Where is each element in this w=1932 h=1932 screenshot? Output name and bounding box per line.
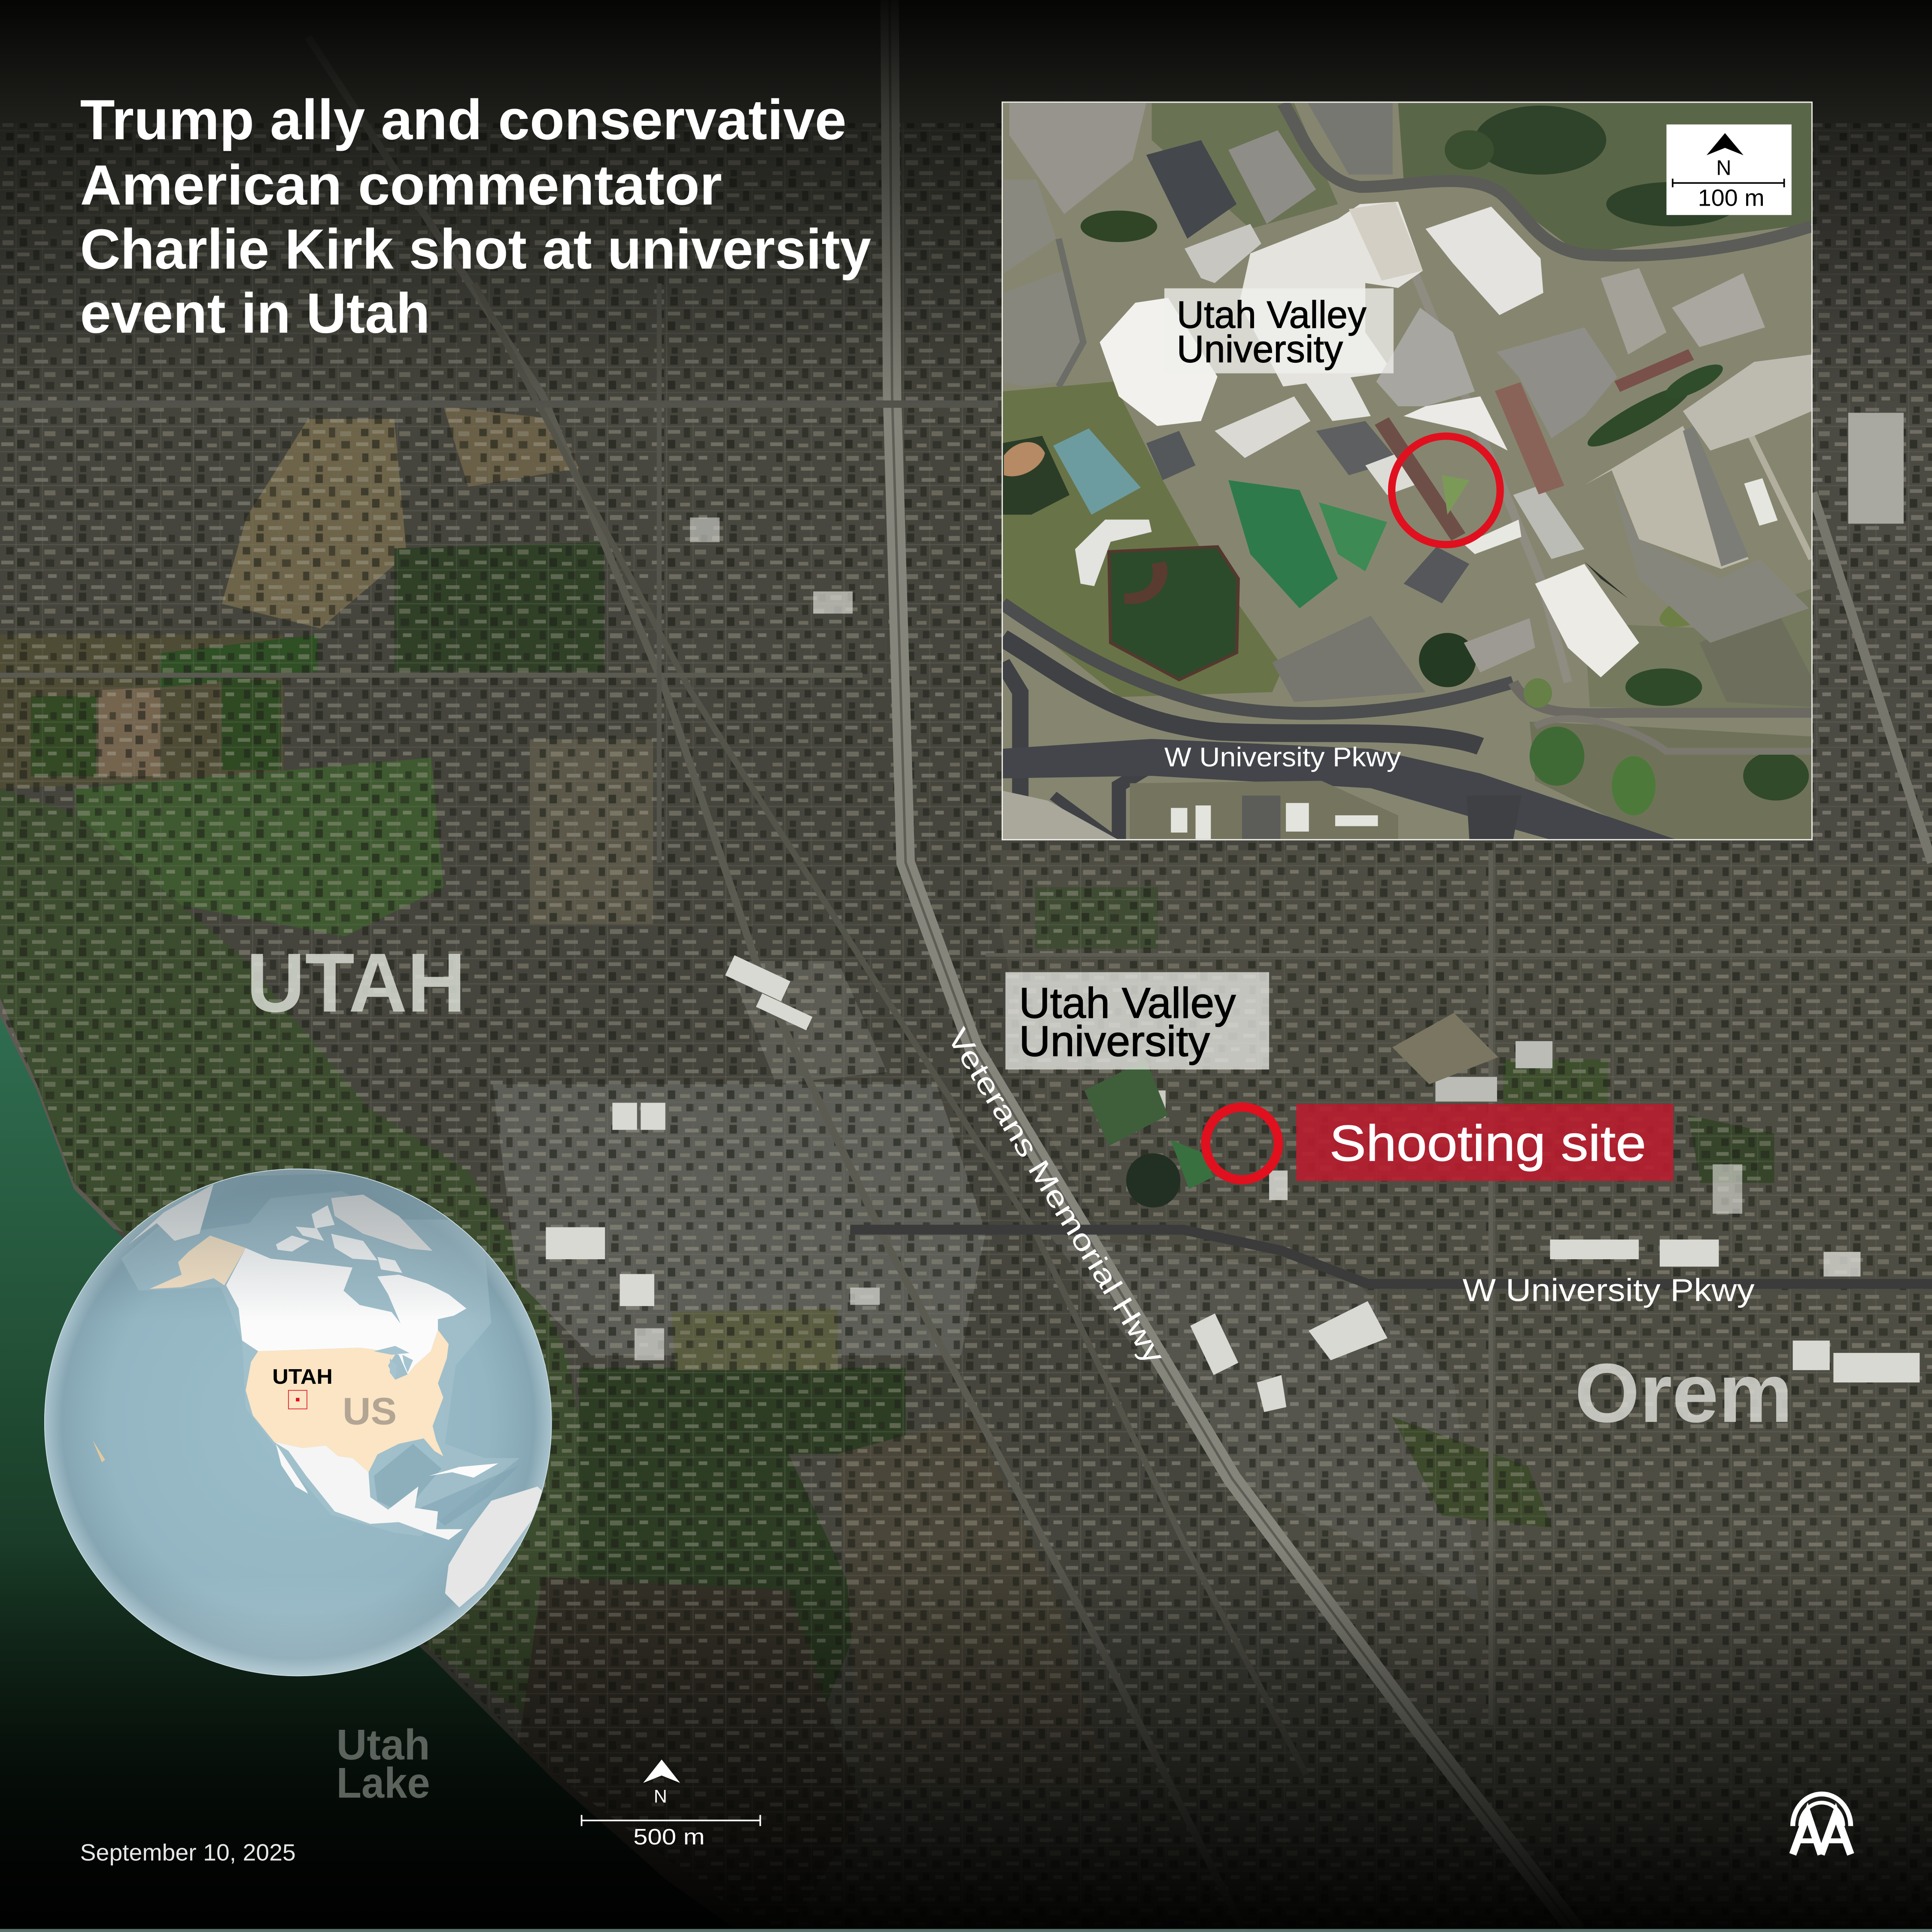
marker: shooting site ring <box>1206 1107 1279 1180</box>
parking lots <box>1004 103 1812 707</box>
landmass: Russia <box>128 1184 214 1245</box>
globe label: US: US <box>343 1390 397 1433</box>
panel: campus inset map <box>1002 102 1812 840</box>
label: Shooting site: Shooting site <box>1330 1115 1646 1171</box>
main scale bar: 500 m <box>633 1824 705 1849</box>
campus roads <box>1002 103 1812 840</box>
Utah locator box <box>289 1390 307 1409</box>
title: American commentator <box>80 153 722 216</box>
sports fields <box>1002 428 1387 680</box>
label: Utah Valley University: Utah Valley <box>1019 979 1236 1027</box>
title: event in Utah <box>80 281 430 345</box>
inset frame <box>1002 102 1812 840</box>
inset marker: red ring <box>1392 436 1500 544</box>
lawns and tree cover <box>1002 103 1812 840</box>
road label: Veterans Memorial Hwy: Veterans Memorial Hwy <box>941 1022 1171 1370</box>
date: September 10, 2025 <box>80 1840 296 1866</box>
inset label: Utah Valley University: University <box>1177 328 1343 371</box>
inset label: Utah Valley University <box>1164 289 1394 374</box>
main scale bar <box>582 1759 760 1849</box>
inset scale bar <box>1667 125 1792 215</box>
title <box>80 88 871 345</box>
label: Utah Valley University <box>1005 972 1269 1069</box>
inset label: Utah Valley University: Utah Valley <box>1177 293 1367 336</box>
continental shelf <box>121 1173 520 1540</box>
main scale bar: N <box>654 1786 667 1807</box>
landmass: Caribbean islands <box>429 1463 498 1478</box>
map label: Orem: Orem <box>1575 1346 1793 1440</box>
landmass: Alaska <box>149 1236 246 1289</box>
label: Utah Lake <box>336 1721 430 1807</box>
map label: Utah: UTAH <box>246 936 466 1030</box>
title: Trump ally and conservative <box>80 88 847 151</box>
great lakes <box>374 1346 413 1380</box>
landmass: South America <box>445 1486 548 1607</box>
campus buildings <box>1100 140 1812 677</box>
label: Shooting site <box>1296 1104 1673 1181</box>
globe label: UTAH: UTAH <box>272 1365 333 1388</box>
title: Charlie Kirk shot at university <box>80 217 871 281</box>
landmass: Mexico and Central America <box>274 1442 463 1540</box>
inset scale bar: 100 m <box>1698 185 1765 211</box>
lake <box>0 1017 739 1932</box>
logo: Anadolu Agency <box>1793 1794 1851 1854</box>
panel: locator globe <box>44 1169 552 1676</box>
landmass: Hawaii <box>93 1440 105 1462</box>
road label: W University Pkwy: W University Pkwy <box>1463 1272 1755 1308</box>
landmass: Contiguous US <box>246 1330 449 1472</box>
inset scale bar: N <box>1716 157 1732 180</box>
inset road label: W University Pkwy: W University Pkwy <box>1164 742 1401 772</box>
landmass: Arctic islands <box>276 1205 402 1273</box>
walkways <box>1382 355 1691 537</box>
landmass: Greenland <box>331 1194 433 1251</box>
label: Utah Lake: Lake <box>336 1759 430 1807</box>
landmass: Canada <box>226 1248 466 1374</box>
label: Utah Lake: Utah <box>336 1721 430 1769</box>
label: Utah Valley University: University <box>1019 1018 1210 1066</box>
